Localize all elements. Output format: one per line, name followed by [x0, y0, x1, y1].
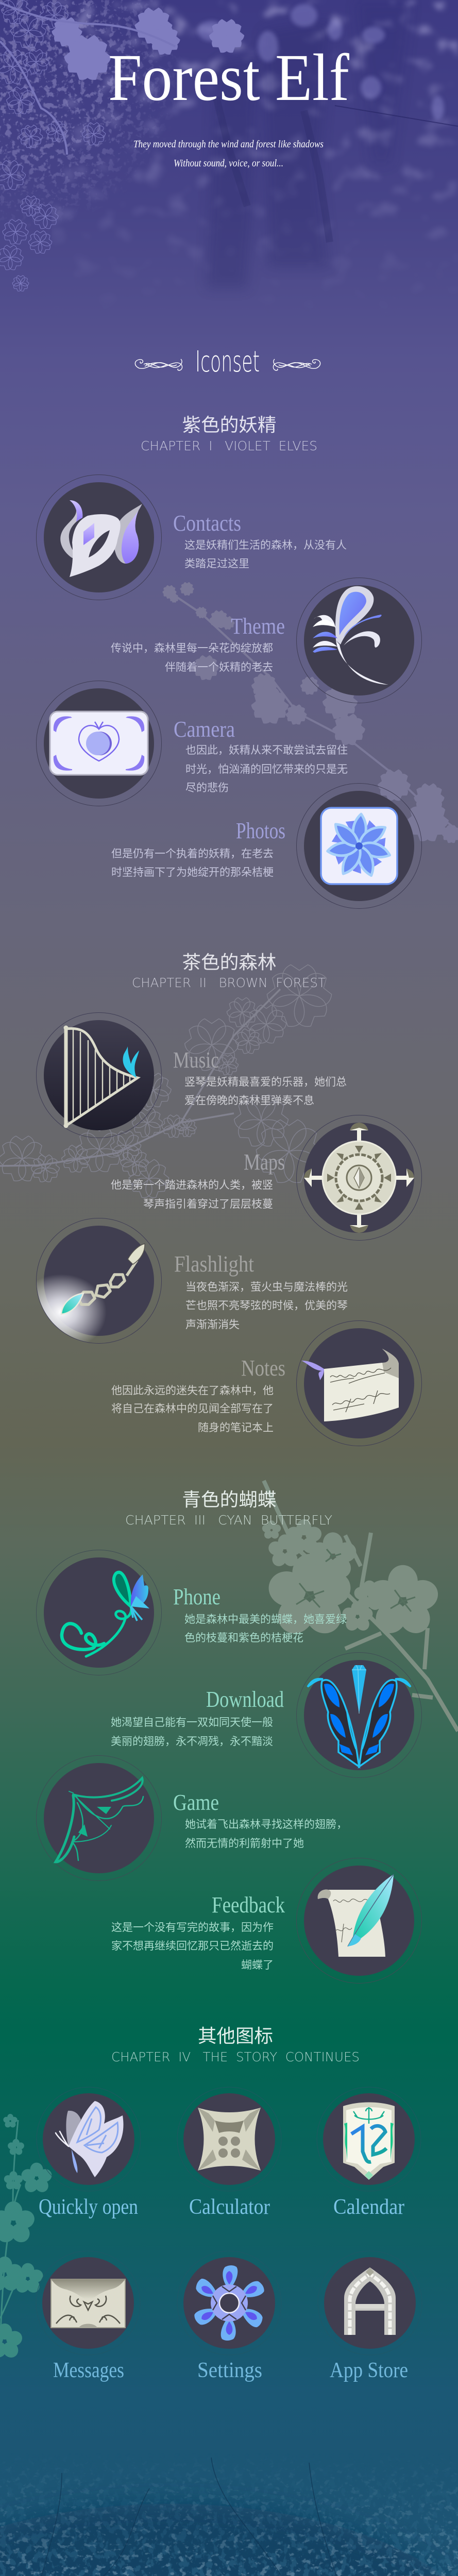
block: game text — [173, 1790, 347, 1850]
decorative branch: chapter 2 — [0, 964, 334, 1200]
chapter 3 heading: CHAPTER III CYAN BUTTERFLY — [125, 1513, 332, 1528]
block: camera text: Camera — [174, 717, 235, 742]
forest background: header — [52, 0, 458, 286]
forest background: main interface — [0, 2452, 458, 2576]
icon: photos — [297, 783, 421, 909]
chapter 4 heading: CHAPTER IV THE STORY CONTINUES — [111, 2049, 360, 2064]
icon: camera — [36, 681, 162, 806]
block: flashlight text: 芒也照不亮琴弦的时候，优美的琴 — [185, 1300, 348, 1312]
block: flashlight text — [174, 1251, 348, 1331]
block: phone text: 色的枝蔓和紫色的桔梗花 — [184, 1632, 303, 1644]
block: phone text: 她是森林中最美的蝴蝶，她喜爱绿 — [184, 1614, 347, 1625]
heading: Iconset — [135, 345, 320, 379]
icon: contacts — [36, 475, 162, 600]
block: feedback text: 家不想再继续回忆那只已然逝去的 — [111, 1940, 274, 1952]
block: music text: 竖琴是妖精最喜爱的乐器，她们总 — [184, 1076, 347, 1088]
heading: Iconset: Iconset — [195, 345, 260, 379]
chapter 2 heading — [132, 952, 326, 990]
chapter 1 heading: CHAPTER I VIOLET ELVES — [141, 438, 317, 453]
icon card: app store: App Store — [330, 2359, 408, 2382]
block: flashlight text: 声渐渐消失 — [185, 1319, 240, 1331]
icon card: settings: Settings — [197, 2359, 262, 2382]
icon card: quickly open: Quickly open — [39, 2195, 138, 2219]
block: feedback text: 这是一个没有写完的故事，因为作 — [111, 1922, 274, 1934]
chapter 3 heading: 青色的蝴蝶 — [182, 1489, 276, 1510]
decorative branch: chapter 1 — [162, 582, 458, 844]
decorative branch: chapter 3 — [261, 1481, 458, 1731]
block: camera text: 也因此，妖精从来不敢尝试去留住 — [185, 744, 348, 756]
block: contacts text — [173, 511, 347, 570]
icon: game — [36, 1756, 162, 1880]
block: contacts text: 这是妖精们生活的森林，从没有人 — [184, 539, 347, 551]
block: music text: Music — [173, 1047, 219, 1073]
block: feedback text: Feedback — [212, 1892, 285, 1918]
icon card: calculator: Calculator — [189, 2195, 270, 2219]
block: photos text: 时坚持画下了为她绽开的那朵桔梗 — [111, 867, 274, 878]
block: download text — [111, 1687, 284, 1748]
tagline — [133, 139, 324, 169]
icon: phone — [36, 1550, 162, 1675]
chapter 1 heading — [141, 414, 317, 453]
block: maps text: Maps — [244, 1149, 285, 1175]
block: game text: 她试着飞出森林寻找这样的翅膀， — [185, 1819, 347, 1831]
block: flashlight text: Flashlight — [174, 1251, 254, 1277]
tagline: Without sound, voice, or soul... — [174, 158, 283, 169]
title: Forest Elf — [108, 41, 350, 115]
block: contacts text: 类踏足过这里 — [184, 558, 249, 570]
icon: maps — [297, 1115, 421, 1241]
chapter 4 heading: 其他图标 — [198, 2025, 273, 2046]
chapter 3 heading — [125, 1489, 332, 1528]
block: maps text: 琴声指引着穿过了层层枝蔓 — [143, 1198, 273, 1210]
icon: flashlight — [16, 1218, 162, 1350]
icon card: calendar — [317, 2087, 421, 2219]
chapter 2 heading: CHAPTER II BROWN FOREST — [132, 975, 326, 990]
block: maps text — [111, 1149, 285, 1210]
block: game text: Game — [173, 1790, 219, 1815]
icon card: messages: Messages — [53, 2359, 124, 2382]
block: camera text: 时光，怕汹涌的回忆带来的只是无 — [185, 764, 348, 775]
block: theme text: Theme — [231, 614, 285, 639]
block: music text — [173, 1047, 347, 1107]
block: download text: 她渴望自己能有一双如同天使一般 — [111, 1717, 273, 1728]
icon: theme — [297, 578, 421, 703]
block: theme text: 传说中，森林里每一朵花的绽放都 — [111, 642, 273, 654]
chapter 1 heading: 紫色的妖精 — [182, 414, 276, 435]
block: download text: Download — [206, 1687, 284, 1712]
block: download text: 美丽的翅膀，永不凋残，永不黯淡 — [111, 1736, 273, 1748]
chapter 2 heading: 茶色的森林 — [182, 952, 276, 973]
icon: download — [297, 1653, 421, 1777]
block: flashlight text: 当夜色渐深，萤火虫与魔法棒的光 — [185, 1281, 348, 1293]
block: notes text: 他因此永远的迷失在了森林中，他 — [111, 1385, 274, 1397]
icon card: calculator — [177, 2087, 281, 2219]
block: camera text — [174, 717, 348, 794]
block: photos text: Photos — [236, 818, 285, 843]
block: feedback text: 蝴蝶了 — [241, 1959, 274, 1971]
block: game text: 然而无情的利箭射中了她 — [185, 1838, 304, 1850]
block: theme text — [111, 614, 285, 673]
icon card: quickly open — [37, 2087, 141, 2219]
icon card: app store — [318, 2251, 422, 2382]
block: music text: 爱在傍晚的森林里弹奏不息 — [184, 1095, 314, 1107]
icon: notes — [297, 1321, 421, 1446]
chapter 4 heading — [111, 2025, 360, 2064]
icon: music — [36, 1013, 162, 1138]
decorative branch: chapter 4 — [0, 2114, 54, 2361]
floral corner: top-left — [0, 0, 246, 299]
block: photos text — [111, 818, 285, 878]
block: phone text: Phone — [173, 1584, 220, 1609]
block: feedback text — [111, 1892, 285, 1971]
block: maps text: 他是第一个踏进森林的人类，被竖 — [111, 1179, 273, 1191]
block: photos text: 但是仍有一个执着的妖精，在老去 — [111, 848, 274, 860]
block: notes text: 将自己在森林中的见闻全部写在了 — [111, 1403, 274, 1415]
icon card: messages — [36, 2251, 140, 2382]
block: phone text — [173, 1584, 347, 1644]
block: contacts text: Contacts — [173, 511, 241, 536]
icon: feedback — [297, 1858, 421, 1984]
icon card: calendar: Calendar — [333, 2195, 404, 2219]
block: camera text: 尽的悲伤 — [185, 782, 229, 794]
block: notes text: Notes — [241, 1355, 285, 1381]
icon card: settings — [177, 2251, 281, 2382]
block: theme text: 伴随着一个妖精的老去 — [165, 662, 273, 673]
block: notes text — [111, 1355, 285, 1434]
tagline: They moved through the wind and forest like shadows — [133, 139, 324, 150]
block: notes text: 随身的笔记本上 — [198, 1422, 274, 1434]
